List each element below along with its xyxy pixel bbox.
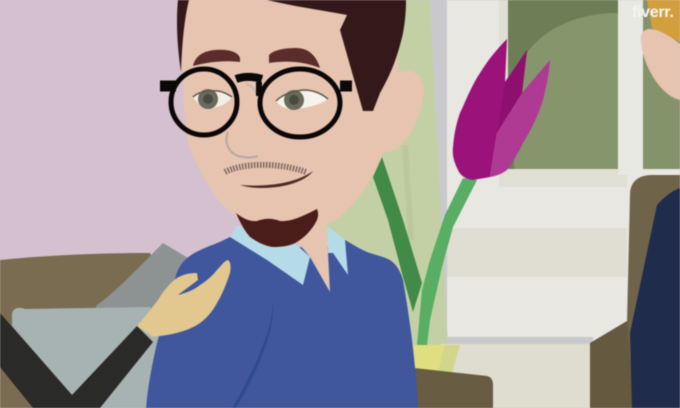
right armchair [590,175,680,408]
nose [226,132,258,158]
background: pink wall [0,0,320,408]
shirt collar [230,225,348,285]
window: left pane [508,0,618,169]
person at right: hair and face [641,0,680,100]
mouth [240,171,313,188]
background: white wall [430,0,680,408]
ear [380,71,424,153]
grey-blue cushion front [12,307,170,408]
hair [177,0,406,111]
tulip: flower [453,39,550,180]
tulip: dark green stem [373,157,422,312]
left sofa: bottom right [405,367,493,408]
sweater fold [232,303,273,408]
right eye [276,90,328,110]
window: right pane [643,0,680,169]
fiverr watermark: fiverr. [632,4,674,21]
black sleeve [0,313,153,408]
sweater [146,237,418,408]
background: wall band [447,228,627,277]
window: sill and frame [499,0,627,187]
background: grey window edge [430,0,447,345]
window: mullion [618,0,643,175]
background: baseboard and floor [440,337,593,408]
moustache [225,165,306,172]
left eye [193,89,232,109]
grey cushion back [90,243,188,320]
neck [258,212,330,292]
hand on shoulder [137,260,231,337]
person at right: navy body [630,188,680,408]
vase [412,345,460,372]
tulip: light green stem [417,178,477,345]
left sofa [0,253,180,408]
face [182,0,400,240]
nose bridge shading [246,84,257,96]
background: curtain fold [402,145,414,240]
eyebrows [193,48,320,68]
goatee [236,209,318,247]
glasses [160,69,352,137]
background: green curtain [300,0,448,345]
